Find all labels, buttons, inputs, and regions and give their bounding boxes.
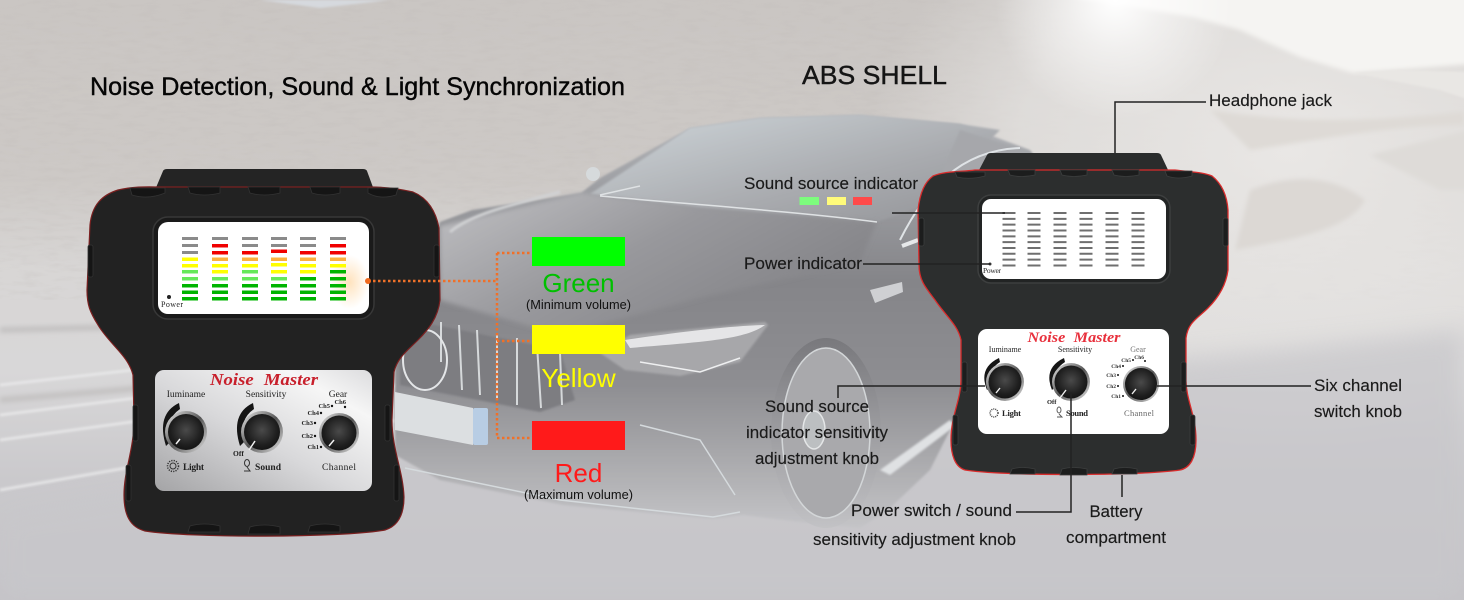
panel labels: Off xyxy=(233,449,244,458)
screen bezel xyxy=(978,195,1170,283)
channel marks: Ch5 xyxy=(318,403,331,410)
car lower trim xyxy=(405,425,740,517)
channel marks: Ch4 xyxy=(307,410,320,417)
panel labels: Iuminame xyxy=(167,390,205,400)
car body xyxy=(395,115,1060,528)
panel labels: Light xyxy=(183,463,205,473)
knob: channel xyxy=(1123,366,1159,402)
channel marks: Ch3 xyxy=(301,420,314,427)
orange dotted connectors xyxy=(368,253,530,438)
callout: sound source indicator sensitivity adjustment knob: Sound source xyxy=(765,398,869,416)
panel labels: Sensitivity xyxy=(1058,345,1092,354)
knob: luminance xyxy=(984,358,1024,401)
channel marks xyxy=(301,399,347,451)
channel marks: Ch5 xyxy=(1121,358,1131,364)
callout: headphone jack: Headphone jack xyxy=(1209,92,1333,110)
legend: yellow: Yellow xyxy=(541,363,616,393)
panel labels: Gear xyxy=(329,390,348,400)
legend: green: Green xyxy=(542,268,615,298)
power mark: Power xyxy=(983,266,1002,275)
channel marks: Ch6 xyxy=(334,399,347,406)
screen bezel xyxy=(153,217,374,319)
callout: power indicator: Power indicator xyxy=(744,255,863,273)
device body xyxy=(918,170,1228,474)
panel labels: Sound xyxy=(255,463,282,473)
panel labels xyxy=(989,345,1155,418)
callout: power switch / sound sensitivity adjustment knob xyxy=(813,392,1071,549)
car grille xyxy=(400,318,575,412)
callout: power switch / sound sensitivity adjustment knob: Power switch / sound xyxy=(851,502,1012,520)
rubber bumps xyxy=(88,187,439,534)
panel labels xyxy=(167,390,356,473)
legend: yellow xyxy=(532,325,625,393)
control panel xyxy=(155,370,372,491)
callout: headphone jack xyxy=(1115,92,1333,153)
right device: unlit xyxy=(918,153,1228,475)
panel labels: Off xyxy=(1047,399,1057,406)
legend: red: (Maximum volume) xyxy=(524,487,633,502)
legend: green: (Minimum volume) xyxy=(526,297,631,312)
legend: green xyxy=(526,237,631,312)
brand name: Noise Master xyxy=(1026,330,1121,346)
sound icon xyxy=(1057,407,1062,417)
panel labels: Iuminame xyxy=(989,345,1022,354)
panel labels: Channel xyxy=(1124,408,1155,418)
power indicator: Power xyxy=(161,300,183,309)
channel marks: Ch1 xyxy=(307,444,319,451)
callout: six channel switch knob xyxy=(1157,377,1402,421)
sound icon xyxy=(244,460,250,471)
panel labels: Channel xyxy=(322,463,356,473)
control panel xyxy=(978,329,1169,434)
device body xyxy=(87,187,440,536)
left device: lit indicator xyxy=(87,169,440,536)
channel marks: Ch3 xyxy=(1106,373,1116,379)
knob: sensitivity xyxy=(237,403,283,453)
knob: luminance xyxy=(163,403,207,453)
knob: sensitivity xyxy=(1049,358,1090,401)
callout: six channel switch knob: switch knob xyxy=(1314,403,1402,421)
panel labels: Gear xyxy=(1130,345,1146,354)
car side glass xyxy=(920,130,1050,260)
legend: red xyxy=(524,421,633,502)
knob: channel xyxy=(319,413,359,453)
car headlight xyxy=(600,322,768,376)
channel marks: Ch4 xyxy=(1111,364,1121,370)
callout: sound source indicator sensitivity adjustment knob xyxy=(746,386,985,468)
screen xyxy=(982,199,1166,279)
car front wheel xyxy=(771,338,881,528)
device top tab xyxy=(155,169,374,190)
LED columns xyxy=(182,237,346,300)
brand name: Noise Master xyxy=(209,370,318,389)
rubber bumps xyxy=(919,170,1228,475)
title: noise detection: Noise Detection, Sound & Light Synchronization xyxy=(90,73,625,101)
light icon xyxy=(168,460,178,472)
channel marks: Ch1 xyxy=(1111,394,1121,400)
light icon xyxy=(990,409,998,417)
connector start dot xyxy=(365,278,371,284)
device top tab xyxy=(978,153,1169,172)
callout: six channel switch knob: Six channel xyxy=(1314,377,1402,395)
indicator colour swatches xyxy=(800,197,872,205)
callout: battery compartment: Battery xyxy=(1090,503,1143,521)
callout: sound source indicator sensitivity adjustment knob: indicator sensitivity xyxy=(746,424,889,442)
car windshield xyxy=(590,115,1000,222)
channel marks: Ch2 xyxy=(301,433,313,440)
panel labels: Sound xyxy=(1066,408,1088,418)
callout: power switch / sound sensitivity adjustment knob: sensitivity adjustment knob xyxy=(813,531,1016,549)
screen xyxy=(158,222,369,314)
title: ABS shell: ABS SHELL xyxy=(802,60,947,90)
power indicator xyxy=(161,295,183,309)
legend: red: Red xyxy=(555,458,602,488)
panel labels: Sensitivity xyxy=(246,390,287,400)
callout: sound source indicator sensitivity adjustment knob: adjustment knob xyxy=(755,450,879,468)
callout: sound source indicator: Sound source indicator xyxy=(744,175,919,193)
callout: battery compartment xyxy=(1066,475,1166,547)
channel marks: Ch6 xyxy=(1134,355,1144,361)
panel labels: Light xyxy=(1002,408,1021,418)
LED columns (unlit) xyxy=(1009,212,1138,268)
callout: battery compartment: compartment xyxy=(1066,529,1166,547)
car behind the devices xyxy=(395,115,1060,528)
channel marks xyxy=(1106,355,1146,400)
channel marks: Ch2 xyxy=(1106,384,1116,390)
car hood xyxy=(440,193,877,335)
car number plate xyxy=(395,392,473,445)
